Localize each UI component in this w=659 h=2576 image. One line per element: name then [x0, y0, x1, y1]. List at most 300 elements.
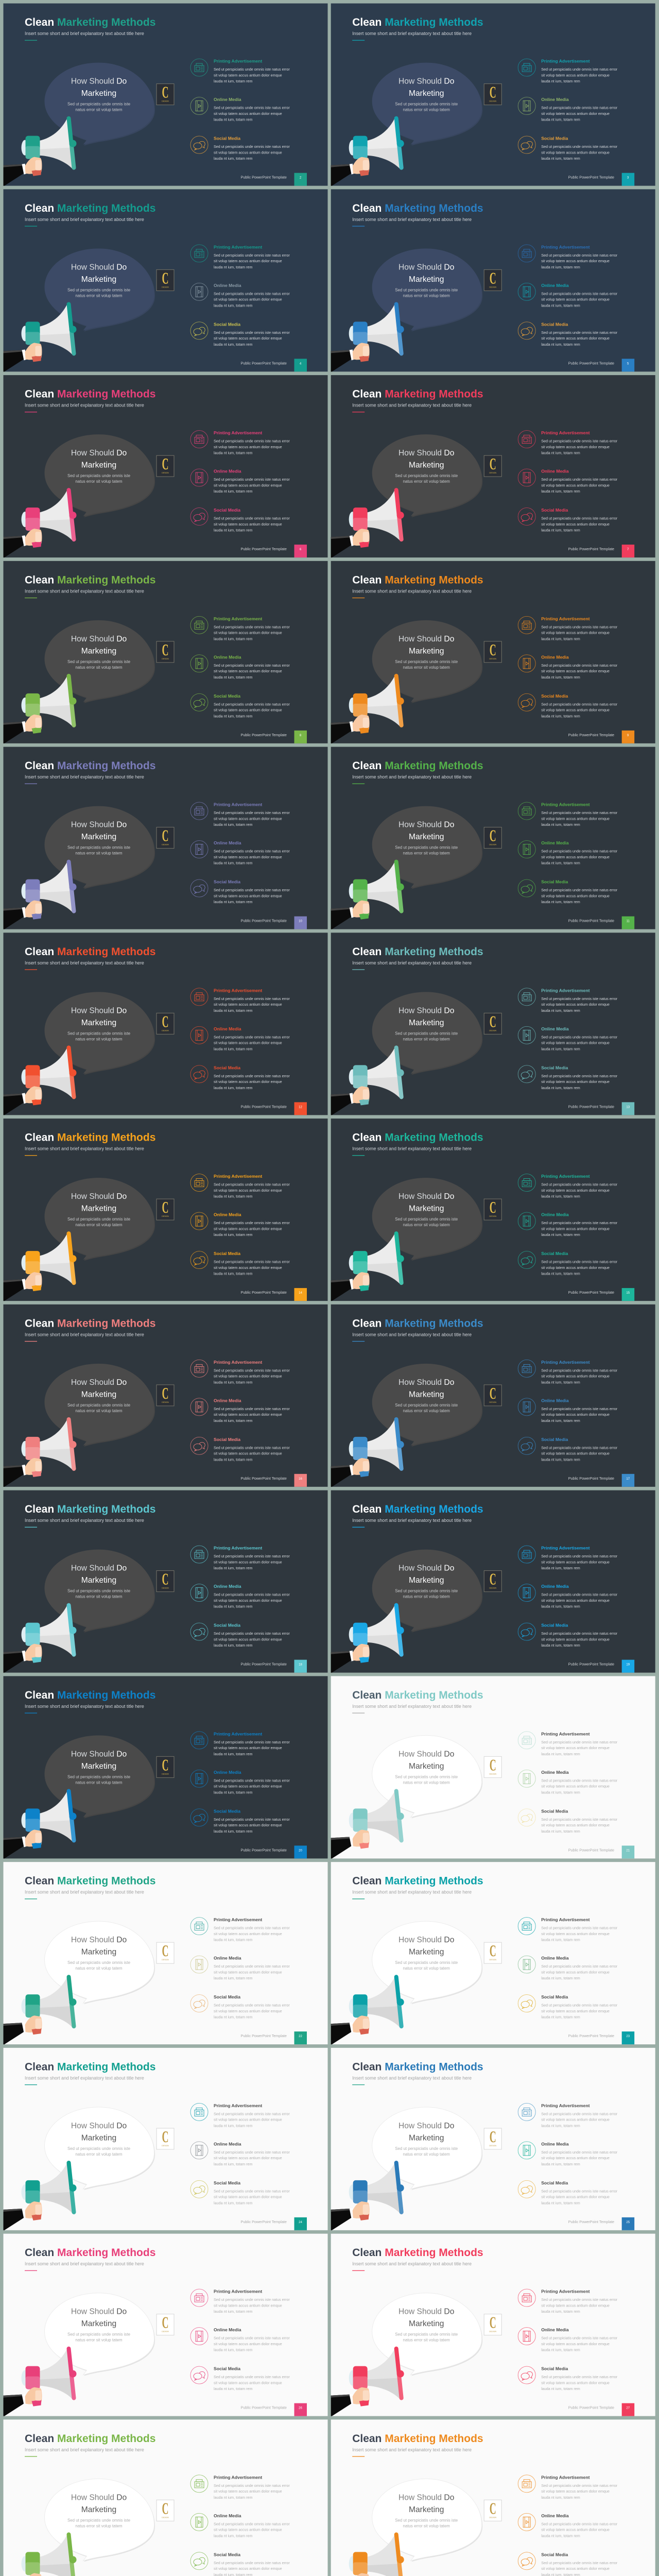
footer: Public PowerPoint Template — [568, 1476, 614, 1481]
speech bubble — [44, 1550, 155, 1633]
item: online media — [518, 654, 618, 680]
bubble heading: How Should Do — [398, 449, 454, 457]
title: Clean Marketing Methods — [25, 16, 155, 28]
item: online media: Online Media — [214, 1398, 241, 1403]
subtitle: Insert some short and brief explanatory text about title here — [352, 2261, 472, 2266]
item: printing advertisement: sit volup tatem accus antium dolor emque — [541, 1374, 610, 1379]
logo badge: DESIGN — [162, 1215, 169, 1217]
logo badge — [484, 83, 501, 105]
item: online media: Sed ut perspiciatis unde omnis iste natus error — [541, 1592, 618, 1597]
speech bubble — [44, 1178, 155, 1261]
item: online media: Online Media — [214, 654, 241, 659]
item: printing advertisement: Sed ut perspiciatis unde omnis iste natus error — [214, 1182, 290, 1187]
logo badge: C — [162, 2499, 169, 2517]
item: online media: sit volup tatem accus antium dolor emque — [541, 669, 610, 673]
item: printing advertisement: Sed ut perspiciatis unde omnis iste natus error — [214, 253, 290, 258]
bubble text: natus error sit volup tatem — [75, 479, 123, 484]
item: printing advertisement — [518, 988, 618, 1013]
item: printing advertisement — [518, 430, 618, 455]
item: online media — [190, 1956, 290, 1980]
item: printing advertisement: Printing Advertisement — [214, 988, 262, 993]
item: online media — [518, 1212, 618, 1237]
item: social media — [190, 1065, 290, 1090]
bubble heading: How Should Do — [398, 1006, 454, 1015]
item: online media: Online Media — [541, 469, 569, 474]
item: printing advertisement: Sed ut perspiciatis unde omnis iste natus error — [214, 1368, 290, 1372]
item: online media: lauda nt ium, totam rem — [214, 2162, 253, 2166]
logo badge — [157, 1941, 174, 1963]
page number — [622, 1288, 634, 1301]
bubble text: natus error sit volup tatem — [75, 2338, 123, 2343]
page number: 6 — [300, 548, 302, 551]
megaphone — [3, 1419, 76, 1487]
item: printing advertisement — [518, 616, 618, 641]
item: printing advertisement: Sed ut perspiciatis unde omnis iste natus error — [541, 624, 618, 629]
item: online media: lauda nt ium, totam rem — [541, 1232, 580, 1237]
page number — [622, 2217, 634, 2230]
logo badge: C — [490, 2127, 496, 2146]
item: printing advertisement: lauda nt ium, totam rem — [214, 2123, 253, 2128]
item: printing advertisement — [190, 1174, 290, 1199]
item: online media: lauda nt ium, totam rem — [214, 1604, 253, 1609]
logo badge — [157, 2127, 174, 2149]
item: printing advertisement: Sed ut perspiciatis unde omnis iste natus error — [541, 2297, 618, 2302]
page number — [294, 917, 307, 929]
item: printing advertisement: lauda nt ium, totam rem — [214, 2309, 253, 2314]
item: online media: Online Media — [541, 2327, 569, 2332]
item: printing advertisement: Sed ut perspiciatis unde omnis iste natus error — [541, 2111, 618, 2116]
footer: Public PowerPoint Template — [241, 2405, 287, 2410]
item: printing advertisement: sit volup tatem accus antium dolor emque — [541, 2117, 610, 2122]
item: printing advertisement: lauda nt ium, totam rem — [214, 2495, 253, 2500]
footer: Public PowerPoint Template — [241, 175, 287, 180]
item: social media — [190, 2366, 290, 2391]
item: social media: lauda nt ium, totam rem — [541, 1829, 580, 1834]
logo badge — [157, 1198, 174, 1220]
bubble heading: How Should Do — [398, 1192, 454, 1201]
item: online media: sit volup tatem accus antium dolor emque — [541, 1970, 610, 1974]
slide 28 — [3, 2419, 327, 2576]
item: online media: Online Media — [541, 654, 569, 659]
bubble heading: Marketing — [81, 1390, 116, 1399]
item: social media: sit volup tatem accus antium dolor emque — [541, 2566, 610, 2571]
item: printing advertisement: lauda nt ium, totam rem — [541, 1008, 580, 1013]
item: printing advertisement: Sed ut perspiciatis unde omnis iste natus error — [541, 810, 618, 815]
background — [331, 933, 655, 1115]
bubble text: Sed ut perspiciatis unde omnis iste — [67, 287, 131, 292]
item: printing advertisement — [190, 616, 290, 641]
bubble text: Sed ut perspiciatis unde omnis iste — [395, 1589, 458, 1594]
bubble heading: How Should Do — [398, 821, 454, 829]
background — [3, 1304, 327, 1487]
item: social media: Sed ut perspiciatis unde omnis iste natus error — [541, 144, 618, 149]
item: printing advertisement: sit volup tatem accus antium dolor emque — [214, 2303, 282, 2308]
title rule — [25, 2456, 37, 2457]
item: printing advertisement: Printing Advertisement — [214, 2289, 262, 2294]
item: online media: sit volup tatem accus antium dolor emque — [541, 855, 610, 859]
bubble heading: How Should Do — [71, 2493, 127, 2502]
item: printing advertisement — [190, 2475, 290, 2500]
logo badge — [484, 268, 501, 291]
item: online media — [518, 840, 618, 866]
item: online media — [190, 1770, 290, 1794]
title: Clean Marketing Methods — [352, 1132, 483, 1144]
page number: 17 — [626, 1478, 630, 1481]
item: online media: Online Media — [541, 283, 569, 288]
item: social media: sit volup tatem accus antium dolor emque — [214, 1637, 282, 1641]
page number: 9 — [627, 734, 629, 737]
item: social media: lauda nt ium, totam rem — [541, 2200, 580, 2205]
item: online media: Online Media — [214, 1212, 241, 1217]
bubble heading: How Should Do — [71, 77, 127, 86]
item: online media — [518, 2513, 618, 2538]
item: printing advertisement: Sed ut perspiciatis unde omnis iste natus error — [541, 1554, 618, 1558]
footer: Public PowerPoint Template — [241, 2033, 287, 2038]
item: online media — [190, 1212, 290, 1237]
item: online media — [518, 1956, 618, 1980]
title: Clean Marketing Methods — [25, 2061, 155, 2073]
bubble text: Sed ut perspiciatis unde omnis iste — [395, 845, 458, 850]
item: social media: Sed ut perspiciatis unde omnis iste natus error — [541, 1445, 618, 1450]
title rule — [352, 1527, 365, 1528]
item: social media: lauda nt ium, totam rem — [214, 1086, 253, 1090]
speech bubble — [372, 1364, 482, 1447]
bubble heading: How Should Do — [71, 1192, 127, 1201]
item: online media: sit volup tatem accus antium dolor emque — [214, 1784, 282, 1789]
item: online media: Online Media — [541, 1398, 569, 1403]
speech bubble — [372, 1735, 482, 1818]
item: social media: sit volup tatem accus antium dolor emque — [214, 1451, 282, 1456]
item: social media: lauda nt ium, totam rem — [541, 714, 580, 718]
item: printing advertisement: sit volup tatem accus antium dolor emque — [214, 631, 282, 635]
item: social media: Social Media — [541, 2552, 568, 2557]
title rule — [25, 2084, 37, 2085]
page number — [622, 2403, 634, 2416]
bubble text: natus error sit volup tatem — [403, 1780, 450, 1785]
item: social media: lauda nt ium, totam rem — [541, 1457, 580, 1462]
item: online media — [190, 1026, 290, 1051]
item: social media: sit volup tatem accus antium dolor emque — [541, 2195, 610, 2199]
title: Clean Marketing Methods — [352, 2433, 483, 2445]
megaphone — [3, 676, 76, 743]
title rule — [352, 2270, 365, 2271]
background — [3, 2048, 327, 2230]
footer: Public PowerPoint Template — [241, 1290, 287, 1295]
slide 22 — [3, 1862, 327, 2044]
item: online media — [190, 2141, 290, 2166]
item: printing advertisement: Sed ut perspiciatis unde omnis iste natus error — [541, 1368, 618, 1372]
page number: 13 — [626, 1106, 630, 1109]
item: social media: sit volup tatem accus antium dolor emque — [541, 336, 610, 341]
item: social media: lauda nt ium, totam rem — [541, 1272, 580, 1276]
item: social media — [190, 1994, 290, 2020]
slide 23 — [331, 1862, 655, 2044]
item: social media — [518, 693, 618, 718]
title: Clean Marketing Methods — [352, 1503, 483, 1515]
bubble heading: Marketing — [409, 1762, 444, 1771]
speech bubble — [44, 1735, 155, 1818]
item: printing advertisement: lauda nt ium, totam rem — [214, 1194, 253, 1199]
footer: Public PowerPoint Template — [568, 361, 614, 365]
item: social media: lauda nt ium, totam rem — [214, 156, 253, 161]
page number — [294, 1102, 307, 1115]
page number — [294, 2217, 307, 2230]
item: social media: Sed ut perspiciatis unde omnis iste natus error — [214, 330, 290, 335]
bubble heading: Marketing — [409, 1205, 444, 1213]
item: social media: sit volup tatem accus antium dolor emque — [541, 1823, 610, 1827]
item: printing advertisement — [190, 430, 290, 455]
speech bubble — [44, 63, 155, 146]
item: online media: lauda nt ium, totam rem — [214, 2533, 253, 2538]
item: printing advertisement: sit volup tatem accus antium dolor emque — [541, 1002, 610, 1007]
item: printing advertisement: lauda nt ium, totam rem — [541, 1938, 580, 1942]
item: online media: Sed ut perspiciatis unde omnis iste natus error — [214, 849, 290, 854]
slide 17 — [331, 1304, 655, 1487]
item: online media: Sed ut perspiciatis unde omnis iste natus error — [541, 663, 618, 668]
background — [3, 4, 327, 186]
title rule — [352, 2084, 365, 2085]
item: printing advertisement: Printing Advertisement — [214, 59, 262, 64]
item: printing advertisement: sit volup tatem accus antium dolor emque — [541, 1188, 610, 1193]
bubble text: Sed ut perspiciatis unde omnis iste — [67, 659, 131, 664]
logo badge: DESIGN — [162, 1959, 169, 1961]
subtitle: Insert some short and brief explanatory text about title here — [25, 1704, 144, 1709]
page number: 15 — [626, 1292, 630, 1295]
item: online media: Sed ut perspiciatis unde omnis iste natus error — [541, 477, 618, 482]
item: online media — [518, 1770, 618, 1794]
footer: Public PowerPoint Template — [241, 1662, 287, 1667]
item: social media: lauda nt ium, totam rem — [214, 342, 253, 347]
page number: 18 — [299, 1664, 302, 1667]
item: online media: sit volup tatem accus antium dolor emque — [214, 2342, 282, 2346]
item: social media — [518, 2180, 618, 2205]
item: social media: sit volup tatem accus antium dolor emque — [214, 2195, 282, 2199]
bubble heading: Marketing — [409, 1576, 444, 1585]
speech bubble — [44, 2293, 155, 2376]
item: social media: Sed ut perspiciatis unde omnis iste natus error — [214, 2003, 290, 2008]
item: social media: Sed ut perspiciatis unde omnis iste natus error — [214, 144, 290, 149]
item: printing advertisement: Printing Advertisement — [541, 1546, 590, 1551]
bubble text: Sed ut perspiciatis unde omnis iste — [67, 1403, 131, 1408]
item: social media — [190, 507, 290, 533]
footer: Public PowerPoint Template — [241, 1476, 287, 1481]
background — [3, 561, 327, 743]
logo badge: DESIGN — [489, 1773, 496, 1775]
slide 5 — [331, 189, 655, 371]
logo badge — [157, 2499, 174, 2521]
logo badge: C — [490, 454, 496, 473]
logo badge: DESIGN — [162, 2145, 169, 2147]
background — [331, 1304, 655, 1487]
speech bubble — [372, 806, 482, 889]
item: social media: sit volup tatem accus antium dolor emque — [214, 336, 282, 341]
item: social media: sit volup tatem accus antium dolor emque — [541, 1637, 610, 1641]
bubble text: natus error sit volup tatem — [75, 1966, 123, 1971]
item: printing advertisement: lauda nt ium, totam rem — [214, 1380, 253, 1384]
item: social media — [518, 136, 618, 161]
item: social media — [518, 2366, 618, 2391]
bubble text: natus error sit volup tatem — [403, 479, 450, 484]
item: online media: Online Media — [541, 1770, 569, 1775]
item: printing advertisement: Printing Advertisement — [214, 802, 262, 807]
item: social media: Social Media — [214, 1994, 240, 1999]
item: printing advertisement: Sed ut perspiciatis unde omnis iste natus error — [541, 253, 618, 258]
logo badge: DESIGN — [489, 1401, 496, 1403]
item: social media — [190, 1623, 290, 1648]
item: printing advertisement: Printing Advertisement — [214, 430, 262, 435]
footer: Public PowerPoint Template — [568, 1662, 614, 1667]
logo badge — [157, 1384, 174, 1406]
item: printing advertisement — [518, 1917, 618, 1942]
item: printing advertisement: sit volup tatem accus antium dolor emque — [541, 73, 610, 77]
title: Clean Marketing Methods — [352, 574, 483, 586]
logo badge: DESIGN — [162, 1401, 169, 1403]
item: online media — [190, 469, 290, 494]
item: online media: Online Media — [541, 1584, 569, 1589]
bubble heading: How Should Do — [398, 2493, 454, 2502]
subtitle: Insert some short and brief explanatory text about title here — [25, 2447, 144, 2452]
item: social media: Sed ut perspiciatis unde omnis iste natus error — [214, 702, 290, 706]
item: printing advertisement: Sed ut perspiciatis unde omnis iste natus error — [214, 2483, 290, 2488]
background — [331, 747, 655, 929]
background — [331, 1490, 655, 1673]
item: social media: sit volup tatem accus antium dolor emque — [541, 522, 610, 527]
item: social media: Sed ut perspiciatis unde omnis iste natus error — [541, 2375, 618, 2379]
slide 18 — [3, 1490, 327, 1673]
logo badge: DESIGN — [162, 286, 169, 288]
logo badge: DESIGN — [162, 2331, 169, 2333]
bubble heading: Marketing — [409, 647, 444, 655]
subtitle: Insert some short and brief explanatory text about title here — [25, 403, 144, 408]
footer: Public PowerPoint Template — [568, 1104, 614, 1109]
item: online media: sit volup tatem accus antium dolor emque — [214, 669, 282, 673]
logo badge — [484, 1941, 501, 1963]
logo badge: DESIGN — [162, 100, 169, 103]
item: online media: Sed ut perspiciatis unde omnis iste natus error — [541, 1964, 618, 1969]
logo badge: DESIGN — [489, 1959, 496, 1961]
item: printing advertisement: Sed ut perspiciatis unde omnis iste natus error — [214, 439, 290, 444]
title: Clean Marketing Methods — [352, 760, 483, 772]
page number — [622, 917, 634, 929]
title rule — [352, 1713, 365, 1714]
footer: Public PowerPoint Template — [241, 919, 287, 923]
item: printing advertisement: Printing Advertisement — [541, 802, 590, 807]
bubble text: Sed ut perspiciatis unde omnis iste — [395, 473, 458, 478]
bubble heading: How Should Do — [71, 2308, 127, 2316]
item: social media: lauda nt ium, totam rem — [214, 2015, 253, 2020]
subtitle: Insert some short and brief explanatory text about title here — [25, 1890, 144, 1895]
item: social media: Social Media — [541, 1623, 568, 1628]
page number — [294, 173, 307, 186]
bubble text: natus error sit volup tatem — [403, 1409, 450, 1413]
item: printing advertisement — [518, 1360, 618, 1384]
bubble text: natus error sit volup tatem — [403, 2523, 450, 2528]
footer: Public PowerPoint Template — [241, 361, 287, 365]
subtitle: Insert some short and brief explanatory text about title here — [25, 1146, 144, 1151]
subtitle: Insert some short and brief explanatory text about title here — [25, 1518, 144, 1523]
logo badge — [157, 1012, 174, 1034]
title: Clean Marketing Methods — [25, 946, 155, 958]
footer: Public PowerPoint Template — [568, 2033, 614, 2038]
item: online media: sit volup tatem accus antium dolor emque — [541, 2342, 610, 2346]
megaphone — [3, 304, 76, 371]
background — [331, 4, 655, 186]
bubble text: Sed ut perspiciatis unde omnis iste — [395, 1774, 458, 1779]
bubble heading: Marketing — [81, 1205, 116, 1213]
item: online media: lauda nt ium, totam rem — [214, 675, 253, 680]
item: printing advertisement — [190, 1917, 290, 1942]
bubble text: Sed ut perspiciatis unde omnis iste — [67, 1589, 131, 1594]
item: online media: lauda nt ium, totam rem — [541, 303, 580, 308]
item: social media: lauda nt ium, totam rem — [214, 2200, 253, 2205]
item: online media: Online Media — [214, 1956, 241, 1961]
logo badge — [157, 640, 174, 663]
item: printing advertisement: Printing Advertisement — [541, 1731, 590, 1736]
item: printing advertisement: sit volup tatem accus antium dolor emque — [214, 2117, 282, 2122]
item: social media: Sed ut perspiciatis unde omnis iste natus error — [214, 2189, 290, 2193]
item: social media: Social Media — [214, 2180, 240, 2185]
item: printing advertisement: lauda nt ium, totam rem — [541, 79, 580, 83]
bubble heading: Marketing — [81, 1019, 116, 1027]
item: online media: sit volup tatem accus antium dolor emque — [214, 855, 282, 859]
item: printing advertisement: Sed ut perspiciatis unde omnis iste natus error — [214, 1740, 290, 1744]
megaphone — [331, 1047, 404, 1115]
background — [331, 375, 655, 557]
item: printing advertisement: sit volup tatem accus antium dolor emque — [214, 259, 282, 263]
bubble text: natus error sit volup tatem — [403, 1595, 450, 1599]
item: printing advertisement — [518, 244, 618, 269]
logo badge: C — [162, 1198, 169, 1216]
item: online media — [190, 840, 290, 866]
item: printing advertisement: Printing Advertisement — [541, 1174, 590, 1179]
item: social media: Sed ut perspiciatis unde omnis iste natus error — [214, 2375, 290, 2379]
item: social media: Sed ut perspiciatis unde omnis iste natus error — [214, 2561, 290, 2565]
item: online media: sit volup tatem accus antium dolor emque — [214, 2156, 282, 2160]
item: social media: Sed ut perspiciatis unde omnis iste natus error — [214, 516, 290, 521]
background — [3, 933, 327, 1115]
item: printing advertisement — [190, 988, 290, 1013]
item: social media: lauda nt ium, totam rem — [541, 2015, 580, 2020]
item: printing advertisement — [518, 1731, 618, 1756]
megaphone — [3, 1233, 76, 1301]
logo badge: DESIGN — [162, 1029, 169, 1031]
logo badge: DESIGN — [162, 1587, 169, 1589]
megaphone — [331, 1977, 404, 2044]
item: online media: sit volup tatem accus antium dolor emque — [214, 2528, 282, 2532]
bubble heading: Marketing — [409, 2505, 444, 2514]
item: printing advertisement: Printing Advertisement — [214, 1174, 262, 1179]
title rule — [352, 1155, 365, 1156]
bubble text: natus error sit volup tatem — [403, 851, 450, 856]
title: Clean Marketing Methods — [25, 1875, 155, 1887]
item: printing advertisement: Printing Advertisement — [541, 2289, 590, 2294]
background — [3, 747, 327, 929]
background — [331, 2048, 655, 2230]
title rule — [25, 1155, 37, 1156]
bubble text: natus error sit volup tatem — [75, 2152, 123, 2157]
item: social media: lauda nt ium, totam rem — [541, 1086, 580, 1090]
item: printing advertisement — [518, 1174, 618, 1199]
item: social media: Sed ut perspiciatis unde omnis iste natus error — [214, 1631, 290, 1636]
item: social media: lauda nt ium, totam rem — [541, 1643, 580, 1648]
bubble text: Sed ut perspiciatis unde omnis iste — [395, 287, 458, 292]
item: social media: Social Media — [214, 1437, 240, 1442]
logo badge — [484, 1570, 501, 1592]
item: online media — [190, 1398, 290, 1423]
speech bubble — [372, 1921, 482, 2004]
bubble heading: Marketing — [81, 1762, 116, 1771]
item: printing advertisement — [518, 2289, 618, 2314]
